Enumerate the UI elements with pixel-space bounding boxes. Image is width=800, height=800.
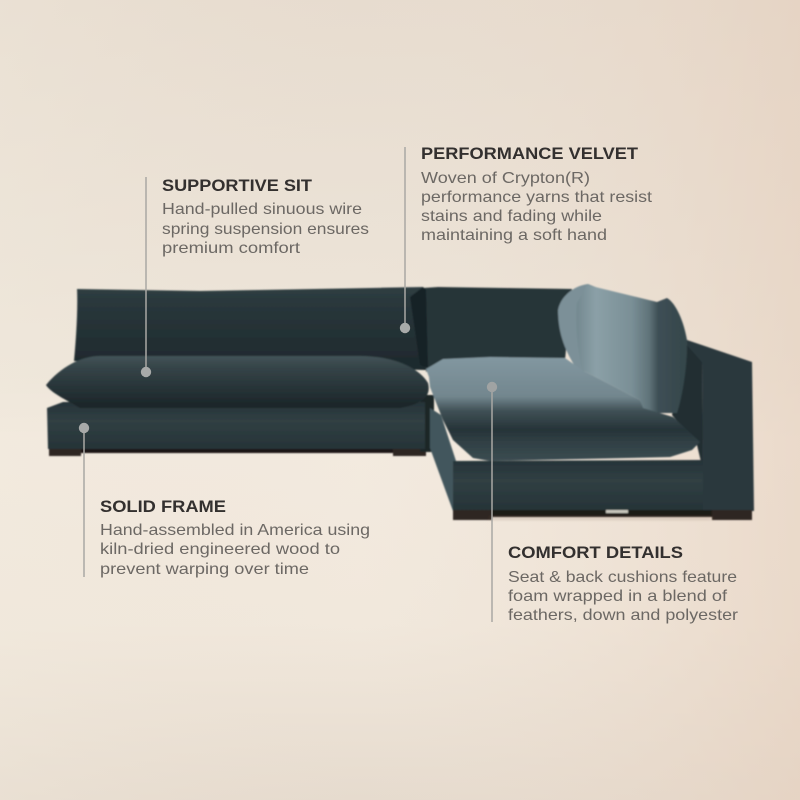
callout: solid frame (79, 423, 370, 578)
right pillow rear (558, 284, 603, 372)
leader: performance velvet (400, 147, 410, 333)
right seat cushion (426, 357, 700, 461)
right front base (453, 460, 703, 511)
left sofa base (47, 402, 425, 449)
left sofa feet (49, 447, 426, 456)
left back cushion (74, 287, 426, 370)
text: comfort details: foam wrapped in a blend of (508, 588, 728, 605)
callout: comfort details (487, 382, 739, 624)
right arm (687, 340, 752, 362)
callout: supportive sit (141, 176, 369, 377)
text: comfort details (508, 569, 739, 624)
text: solid frame: Hand-assembled in America using (100, 522, 370, 539)
heading: solid frame: SOLID FRAME (100, 497, 226, 516)
side of right base (430, 408, 456, 511)
text: performance velvet (421, 170, 653, 244)
leader: supportive sit (141, 177, 151, 377)
left seat cushion (46, 356, 429, 408)
heading: comfort details: COMFORT DETAILS (508, 543, 683, 562)
heading: performance velvet: PERFORMANCE VELVET (421, 144, 639, 163)
text: supportive sit: Hand-pulled sinuous wire (162, 201, 362, 218)
sectional sofa (46, 284, 754, 520)
text: solid frame: prevent warping over time (100, 561, 309, 578)
callout: performance velvet (400, 144, 653, 333)
text: solid frame: kiln-dried engineered wood to (100, 541, 340, 558)
text: performance velvet: maintaining a soft hand (421, 227, 607, 244)
leader: comfort details (487, 382, 497, 622)
text: solid frame (100, 522, 370, 578)
gap behind base (420, 395, 434, 452)
text: performance velvet: Woven of Crypton(R) (421, 170, 590, 187)
right feet (453, 510, 752, 520)
corner back cushion (423, 287, 572, 372)
text: supportive sit: spring suspension ensures (162, 221, 369, 238)
text: supportive sit: premium comfort (162, 240, 301, 257)
text: performance velvet: performance yarns that resist (421, 189, 653, 206)
text: performance velvet: stains and fading while (421, 208, 602, 225)
text: supportive sit (162, 201, 369, 257)
text: comfort details: Seat & back cushions feature (508, 569, 737, 586)
right pillow (576, 285, 687, 413)
text: comfort details: feathers, down and polyester (508, 607, 739, 624)
leader: solid frame (79, 423, 89, 577)
heading: supportive sit: SUPPORTIVE SIT (162, 176, 313, 195)
